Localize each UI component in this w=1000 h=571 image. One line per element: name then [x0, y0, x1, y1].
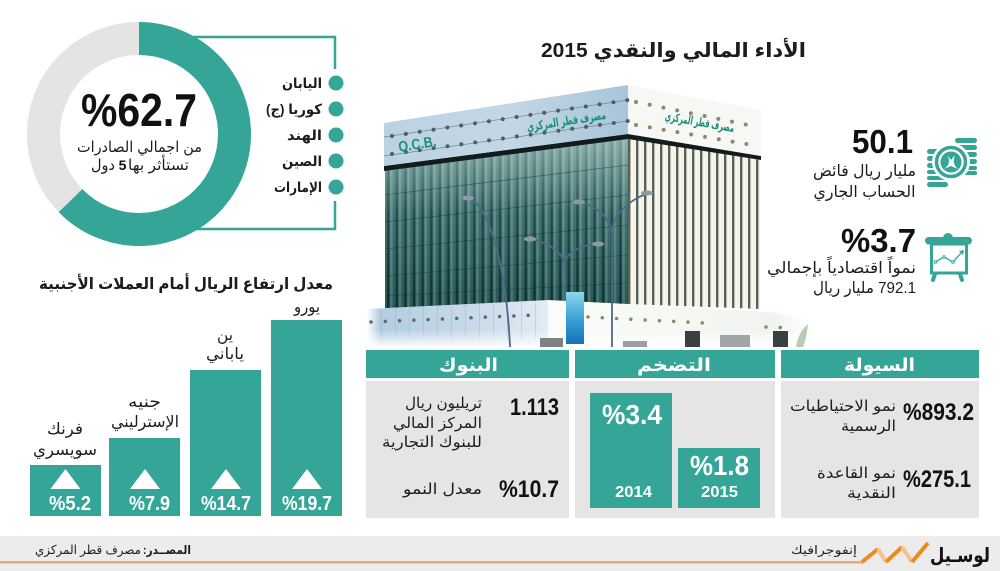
- banks growth rate: [402, 476, 559, 503]
- fin facade: [628, 138, 760, 309]
- stat: current account surplus: [813, 123, 916, 202]
- panel: banks: البنوك: [439, 355, 498, 376]
- building signs: مصرف قطر المركزي: [526, 108, 607, 134]
- banks financial position: [382, 394, 559, 451]
- panel: inflation: [575, 350, 775, 518]
- parapet studs: [392, 100, 758, 154]
- monetary base growth: %275.1: [903, 466, 971, 493]
- legend: top five countries: الصين: [282, 153, 322, 170]
- donut caption: من اجمالي الصادرات: [77, 139, 202, 157]
- logo: zigzag mark: [862, 543, 928, 562]
- banks financial position: تريليون ريال: [405, 395, 482, 412]
- icon: coins: [927, 138, 977, 187]
- bar: 2014: [590, 393, 672, 508]
- podium: [367, 300, 548, 347]
- bar: Japanese yen: [190, 327, 261, 516]
- floor lines: [385, 165, 628, 296]
- bar: Japanese yen: ين: [217, 327, 233, 345]
- bar: sterling: الإسترليني: [111, 414, 179, 432]
- stat: current account surplus: مليار ريال فائض: [813, 163, 916, 181]
- parapet shadow: [384, 134, 761, 171]
- podium studs: [371, 315, 792, 328]
- building signs: [397, 108, 735, 156]
- photo: central bank building: [362, 85, 817, 347]
- donut caption: دول: [91, 157, 115, 174]
- reserves growth: %893.2: [903, 399, 974, 426]
- donut value: %62.7: [81, 84, 197, 136]
- lamp heads: [462, 190, 653, 246]
- building signs: Q.C.B.: [397, 133, 437, 156]
- source note: [35, 543, 191, 558]
- bar: Swiss franc: سويسري: [33, 442, 97, 460]
- donut caption: 5: [119, 157, 127, 173]
- legend frame: [190, 37, 335, 229]
- monetary base growth: [817, 465, 971, 502]
- stat: GDP growth: نمواً اقتصادياً بإجمالي: [767, 255, 916, 278]
- stat: GDP growth: %3.7: [841, 222, 916, 259]
- bar: euro: [271, 299, 342, 516]
- traffic lights: [540, 324, 808, 347]
- bar: Swiss franc: فرنك: [47, 421, 83, 439]
- chart title: معدل ارتفاع الريال أمام العملات الأجنبية: [39, 273, 333, 293]
- bar: 2014: 2014: [615, 484, 652, 501]
- banks financial position: 1.113: [510, 394, 559, 421]
- donut chart: exports share: [44, 38, 234, 230]
- bar chart: riyal appreciation: [30, 299, 342, 516]
- banks growth rate: معدل النمو: [402, 481, 482, 498]
- banks financial position: للبنوك التجارية: [382, 434, 482, 451]
- donut caption: تستأثر بها: [128, 154, 189, 174]
- legend: top five countries: اليابان: [282, 75, 322, 91]
- bar: Swiss franc: [30, 421, 101, 516]
- stat: GDP growth: [767, 222, 916, 298]
- stat: GDP growth: 792.1 مليار ريال: [813, 280, 916, 298]
- bar: sterling: %7.9: [129, 493, 170, 515]
- donut caption: [77, 139, 202, 174]
- icon: presentation board: [925, 233, 972, 280]
- bar: 2014: %3.4: [602, 399, 662, 430]
- source note: المصــدر:: [143, 543, 191, 557]
- blue banner: [566, 292, 584, 344]
- legend: top five countries: كوريا (ج): [266, 101, 323, 118]
- bar: euro: يورو: [293, 299, 320, 317]
- banks financial position: المركز المالي: [393, 415, 482, 433]
- bar: 2015: 2015: [701, 484, 738, 501]
- street lamps: [468, 194, 646, 347]
- monetary base growth: نمو القاعدة: [817, 465, 896, 482]
- panel: inflation: التضخم: [637, 355, 711, 375]
- source note: مصرف قطر المركزي: [35, 543, 141, 558]
- parapet lines: [384, 100, 628, 156]
- reserves growth: [790, 398, 974, 435]
- glass facade: [385, 138, 628, 309]
- legend: top five countries: [266, 75, 344, 196]
- bar: sterling: جنيه: [128, 394, 161, 411]
- bar: Japanese yen: ياباني: [206, 346, 244, 364]
- bar: euro: %19.7: [282, 493, 332, 515]
- legend: top five countries: الهند: [287, 127, 322, 144]
- reserves growth: نمو الاحتياطيات: [790, 398, 896, 415]
- stat: current account surplus: الحساب الجاري: [814, 184, 916, 202]
- bar: Japanese yen: %14.7: [201, 493, 251, 515]
- infographic tag: إنفوجرافيك: [791, 543, 857, 558]
- banks growth rate: %10.7: [499, 476, 559, 503]
- building signs: مصرف قطر المركزي: [664, 109, 735, 135]
- panel: liquidity: [781, 350, 979, 518]
- panel: banks: [366, 350, 569, 518]
- bar: sterling: [109, 394, 180, 516]
- footer band: [0, 536, 1000, 571]
- left parapet: [384, 85, 628, 166]
- right parapet: [628, 85, 761, 156]
- monetary base growth: النقدية: [847, 485, 896, 502]
- panel: liquidity: السيولة: [844, 355, 915, 376]
- main title: الأداء المالي والنقدي 2015: [541, 37, 806, 63]
- bar: 2015: [678, 448, 760, 508]
- legend: top five countries: الإمارات: [274, 179, 322, 196]
- bar: Swiss franc: %5.2: [49, 493, 91, 515]
- reserves growth: الرسمية: [841, 418, 896, 435]
- bar: 2015: %1.8: [690, 450, 749, 481]
- stat: current account surplus: 50.1: [852, 123, 913, 160]
